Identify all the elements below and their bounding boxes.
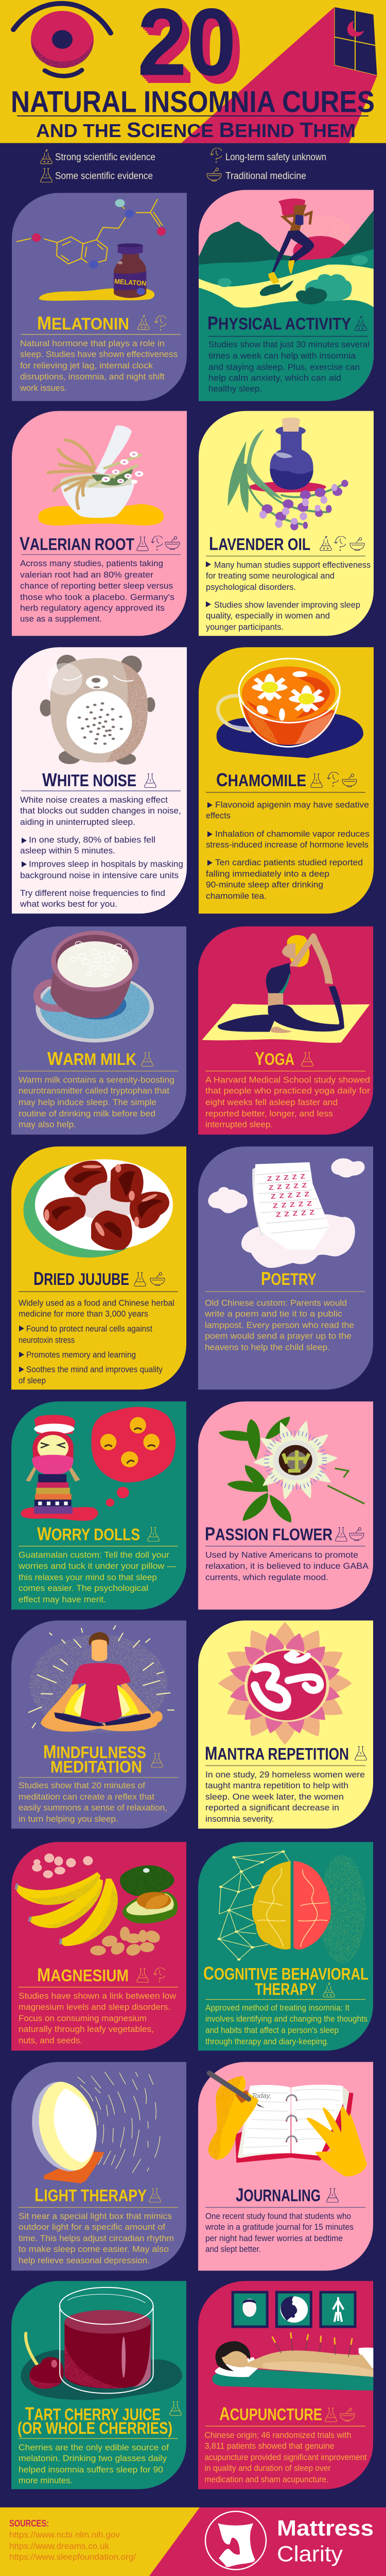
icon: some evidence flask	[41, 168, 52, 182]
text: tart cherry juice: Cherries are the only edible source of	[19, 2442, 169, 2452]
text: yoga: eight weeks fell asleep faster and	[205, 1097, 338, 1107]
icon: some evidence	[336, 1527, 347, 1541]
text: mindfulness meditation: easily summons a sense of relaxation,	[19, 1802, 167, 1812]
icon: traditional	[342, 774, 357, 787]
icon: some evidence	[148, 1527, 159, 1541]
panel: light therapy	[11, 2062, 186, 2270]
text: physical activity: help calm anxiety, which can aid	[208, 373, 341, 383]
text: light therapy	[19, 2211, 174, 2265]
heading: cognitive behavioral therapy	[203, 1962, 369, 1999]
text: poetry: write a poem and tie it to a public	[204, 1309, 342, 1318]
heading: mindfulness meditation	[43, 1741, 146, 1776]
text: valerian root: Across many studies, patients taking	[20, 558, 163, 568]
text: light therapy: help relieve seasonal depression.	[19, 2255, 150, 2265]
text: magnesium	[19, 1991, 177, 2045]
illustration: acupuncture	[212, 2292, 373, 2391]
icon: strong evidence	[320, 536, 331, 551]
heading: melatonin: MELATONIN	[37, 312, 129, 333]
text: warm milk: may help induce sleep. The simple	[19, 1097, 156, 1107]
icon: mortar	[207, 168, 221, 181]
panel: cognitive behavioral therapy	[198, 1842, 373, 2050]
icon: some evidence	[142, 1052, 153, 1066]
heading: chamomile: CHAMOMILE	[216, 769, 306, 790]
legend label strong: Strong scientific evidence	[55, 152, 155, 163]
illustration: poem on clouds: z z z z z	[270, 1189, 310, 1201]
panel: valerian root	[12, 411, 187, 636]
text: lavender oil: younger participants.	[206, 622, 284, 632]
text: magnesium: Focus on consuming magnesium	[19, 2013, 147, 2023]
heading: warm milk: WARM MILK	[47, 1048, 136, 1069]
text: acupuncture: 3,811 patients showed that genuine	[205, 2441, 335, 2451]
text: chamomile: Flavonoid apigenin may have sedative	[215, 800, 369, 809]
heading: cognitive behavioral therapy: THERAPY	[255, 1980, 317, 1999]
legend label safety: Long-term safety unknown	[225, 152, 326, 163]
icon: some evidence	[325, 2408, 337, 2422]
text: physical activity	[208, 339, 370, 394]
panel: mantra repetition	[198, 1620, 373, 1828]
illustration: poem on clouds: z z z z z	[272, 1198, 312, 1210]
text: yoga: that people who practiced yoga daily for	[205, 1086, 370, 1096]
illustration: chamomile tea cup	[217, 658, 363, 758]
text: chamomile	[206, 800, 370, 901]
text: valerian root: those who took a placebo. Germany's	[20, 592, 174, 602]
text: dried jujube: Found to protect neural cells against	[26, 1324, 152, 1333]
text: warm milk	[19, 1075, 174, 1129]
text: dried jujube: Widely used as a food and Chinese herbal	[19, 1298, 174, 1308]
text: worry dolls	[18, 1550, 177, 1604]
text: lavender oil: for treating some neurological and	[206, 570, 335, 581]
illustration: mortar and roots	[38, 426, 164, 526]
text: mantra repetition	[205, 1769, 365, 1824]
text: cognitive behavioral therapy: and habits that affect a person's sleep	[205, 2025, 339, 2035]
text: worry dolls: effect may have merit.	[19, 1594, 106, 1604]
illustration: brain and network	[218, 1851, 366, 1963]
icon: strong evidence	[138, 315, 149, 330]
heading: passion flower: PASSION FLOWER	[205, 1523, 332, 1544]
illustration: poem on clouds: z z z z z	[268, 1180, 307, 1192]
text: acupuncture: acupuncture provided significant improvement	[205, 2452, 367, 2462]
text: chamomile: 90-minute sleep after drinking	[206, 879, 323, 889]
footer	[0, 2507, 386, 2576]
panel: poetry	[198, 1146, 373, 1389]
text: cognitive behavioral therapy: through therapy and diary-keeping.	[205, 2036, 329, 2046]
text: yoga: A Harvard Medical School study showed	[205, 1075, 370, 1085]
panel: melatonin	[12, 193, 187, 401]
icon: traditional	[150, 1273, 165, 1285]
illustration: runner in landscape	[199, 198, 374, 404]
text: journaling: One recent study found that students who	[205, 2211, 351, 2221]
text: warm milk: routine of drinking milk before bed	[19, 1108, 155, 1118]
heading: tart cherry juice: (OR WHOLE CHERRIES)	[17, 2419, 172, 2438]
illustration: light therapy lamp	[32, 2072, 160, 2183]
text: worry dolls: this relaxes your mind so that sleep	[19, 1572, 157, 1582]
text: white noise: what works best for you.	[20, 899, 117, 909]
text: journaling: per night had fewer worries at bedtime	[205, 2233, 343, 2243]
icon: some evidence	[327, 2188, 338, 2202]
illustration: journal and hands: Today,	[252, 2092, 271, 2099]
logo wordmark: Mattress	[277, 2516, 374, 2540]
illustration: plate of jujubes	[23, 1159, 173, 1258]
panel: magnesium	[11, 1842, 186, 2050]
text: physical activity: and staying asleep. Plus, exercise can	[208, 362, 360, 372]
text: acupuncture: Chinese origin; 46 randomized trials with	[205, 2430, 351, 2440]
text: valerian root	[20, 558, 174, 623]
icon: traditional	[165, 536, 180, 550]
text: passion flower	[205, 1550, 369, 1582]
icon: traditional	[350, 537, 364, 551]
text: acupuncture	[205, 2430, 367, 2484]
text: melatonin: disruptions, insomnia, and night shift	[20, 371, 165, 381]
sources heading: SOURCES:	[9, 2518, 49, 2529]
text: lavender oil	[206, 560, 371, 632]
illustration: lavender oil bottle	[228, 417, 348, 530]
illustration: journal and hands	[208, 2073, 367, 2176]
icon: strong evidence	[323, 1983, 335, 1997]
text: white noise: White noise creates a masking effect	[20, 794, 168, 805]
text: journaling: and slept better.	[205, 2244, 261, 2254]
logo: mattress clarity mark	[205, 2512, 266, 2570]
panel: mindfulness meditation	[11, 1620, 186, 1828]
text: acupuncture: in quality and duration of sleep over	[205, 2463, 331, 2473]
text: valerian root: herb regulatory agency approved its	[20, 603, 165, 613]
text: white noise	[20, 794, 183, 909]
text: melatonin: sleep. Studies have shown effectiveness	[20, 349, 178, 359]
panel: yoga	[198, 926, 373, 1134]
text: cognitive behavioral therapy: Approved method of treating insomnia: It	[205, 2003, 349, 2013]
text: journaling	[205, 2211, 354, 2254]
text: valerian root: valerian root had an 80% greater	[20, 570, 153, 580]
legend label traditional: Traditional medicine	[225, 171, 306, 181]
logo wordmark	[277, 2516, 374, 2566]
text: white noise: asleep within 5 minutes.	[20, 845, 115, 855]
panel: lavender oil	[199, 411, 374, 636]
text: tart cherry juice: helped insomnia suffers sleep for 90	[19, 2464, 163, 2475]
text: light therapy: time. This helps adjust circadian rhythm	[19, 2233, 174, 2243]
heading: mindfulness meditation: MINDFULNESS	[43, 1741, 146, 1762]
icon: some evidence	[134, 1272, 146, 1286]
text: white noise: Try different noise frequencies to find	[20, 888, 165, 898]
text: cognitive behavioral therapy	[205, 2003, 367, 2046]
text: chamomile: falling immediately into a deep	[206, 869, 329, 878]
text: dried jujube: of sleep	[19, 1375, 46, 1385]
text: poetry: Old Chinese custom: Parents would	[205, 1298, 347, 1308]
text: mantra repetition: sleep. One week later, the women	[205, 1791, 344, 1802]
text: physical activity: Studies show that just 30 minutes several	[208, 339, 370, 349]
text: cognitive behavioral therapy: involves identifying and changing the thoughts	[205, 2013, 367, 2024]
illustration: passion flower	[219, 1417, 364, 1522]
text: magnesium: Studies have shown a link between low	[19, 1991, 177, 2001]
illustration: om lotus mandala	[218, 1622, 352, 1744]
text: tart cherry juice: more minutes.	[19, 2475, 73, 2485]
text: mindfulness meditation: Studies show that 20 minutes of	[19, 1780, 145, 1790]
panel: chamomile	[199, 647, 374, 913]
text: physical activity: times a week can help with insomnia	[208, 350, 356, 361]
icon: traditional	[340, 2408, 355, 2421]
text: yoga: reported better, longer, and less	[205, 1108, 333, 1118]
heading: tart cherry juice: TART CHERRY JUICE	[25, 2403, 161, 2424]
panel: physical activity	[199, 190, 374, 404]
icon: safety unknown	[327, 772, 339, 787]
text: yoga: interrupted sleep.	[205, 1119, 273, 1129]
sources list: https://www.ncbi.nlm.nih.gov	[9, 2530, 120, 2539]
text: white noise: that blocks out sudden changes in noise,	[20, 805, 181, 816]
icon: strong evidence flask	[41, 150, 52, 164]
text: valerian root: use as a supplement.	[20, 614, 102, 623]
text: mantra repetition: taught mantra repetition to help with	[205, 1780, 348, 1790]
heading: dried jujube: DRIED JUJUBE	[33, 1268, 129, 1289]
text: dried jujube: Soothes the mind and improves quality	[26, 1364, 163, 1375]
text: magnesium: naturally through leafy vegetables,	[19, 2024, 154, 2034]
text: lavender oil: psychological disorders.	[206, 582, 296, 592]
illustration: poem on clouds: z z z z z	[267, 1171, 306, 1183]
title line 2: AND THE SCIENCE BEHIND THEM	[36, 118, 356, 142]
illustration: worry doll and thought bubble	[21, 1407, 176, 1521]
text: warm milk: Warm milk contains a serenity-boosting	[19, 1075, 174, 1085]
text: melatonin: for relieving jet lag, internal clock	[20, 361, 153, 370]
header panel	[0, 0, 386, 143]
text: dried jujube: neurotoxin stress	[19, 1335, 75, 1345]
text: light therapy: Sit near a special light box that mimics	[19, 2211, 172, 2221]
icon: safety unknown	[154, 316, 167, 330]
icon: some evidence	[151, 1753, 163, 1767]
light beam from window	[181, 7, 377, 143]
illustration: yoga pose on mat	[202, 934, 370, 1043]
illustration: cup of warm milk	[36, 930, 154, 1042]
text: white noise: Improves sleep in hospitals by masking	[29, 859, 183, 869]
heading: acupuncture: ACUPUNCTURE	[219, 2403, 322, 2424]
icon: some evidence	[149, 2188, 161, 2202]
heading: white noise: WHITE NOISE	[42, 769, 136, 790]
text: worry dolls: comes easier. The psychological	[19, 1583, 148, 1593]
text: mantra repetition: reported a significant decrease in	[205, 1802, 339, 1812]
text: passion flower: Used by Native Americans to promote	[205, 1550, 358, 1560]
panel: journaling	[198, 2062, 373, 2270]
icon: some evidence	[137, 1968, 148, 1982]
text: dried jujube	[19, 1298, 174, 1385]
heading: mindfulness meditation: MEDITATION	[50, 1758, 142, 1776]
heading: tart cherry juice	[17, 2403, 172, 2438]
text: journaling: wrote in a gratitude journal for 15 minutes	[205, 2222, 354, 2232]
text: melatonin	[20, 338, 178, 393]
legend label some: Some scientific evidence	[55, 171, 153, 181]
text: magnesium: magnesium levels and sleep disorders.	[19, 2002, 170, 2012]
illustration: melatonin molecule and bottle	[16, 199, 166, 301]
heading: lavender oil: LAVENDER OIL	[209, 533, 310, 554]
text: lavender oil: quality, especially in women and	[206, 611, 330, 621]
text: yoga	[205, 1075, 370, 1129]
icon: some evidence	[355, 1747, 366, 1760]
illustration: poem on clouds	[208, 1158, 365, 1268]
icon: eye	[13, 4, 111, 76]
panel: acupuncture	[198, 2281, 373, 2489]
panel: dried jujube	[11, 1146, 186, 1389]
text: mantra repetition: insomnia severity.	[205, 1814, 274, 1824]
icon: some evidence	[137, 537, 148, 551]
icon: strong evidence	[355, 316, 366, 331]
text: mindfulness meditation: meditation can create a reflex that	[19, 1791, 154, 1802]
text: warm milk: may also help.	[19, 1119, 76, 1129]
text: lavender oil: Many human studies support effectiveness	[214, 560, 371, 570]
text: light therapy: outdoor light for a specific amount of	[19, 2222, 165, 2232]
text: dried jujube: medicine for more than 3,000 years	[19, 1309, 148, 1318]
icon: some evidence	[170, 2401, 181, 2415]
text: tart cherry juice	[19, 2442, 169, 2485]
panel: white noise	[12, 647, 187, 913]
panel: worry dolls	[11, 1401, 186, 1609]
text: chamomile: effects	[206, 810, 231, 820]
text: physical activity: healthy sleep.	[208, 384, 262, 394]
icon: safety unknown	[151, 536, 163, 550]
text: warm milk: neurotransmitter called tryptophan that	[19, 1086, 169, 1096]
text: chamomile: stress-induced increase of hormone levels	[206, 839, 369, 850]
text: tart cherry juice: melatonin. Drinking two glasses daily	[19, 2453, 167, 2463]
text: chamomile: Ten cardiac patients studied reported	[215, 857, 363, 867]
text: worry dolls: Guatamalan custom: Tell the doll your	[19, 1550, 169, 1560]
sources list	[9, 2530, 136, 2562]
text: light therapy: to make sleep come easier. May also	[19, 2244, 169, 2254]
heading: journaling: JOURNALING	[236, 2184, 321, 2205]
icon: safety unknown	[153, 1968, 166, 1982]
text: poetry: poem would send a prayer up to the	[205, 1331, 352, 1341]
heading: physical activity: PHYSICAL ACTIVITY	[207, 312, 351, 333]
icon: window with moon	[335, 7, 377, 75]
text: dried jujube: Promotes memory and learning	[26, 1349, 136, 1360]
text: melatonin: work issues.	[20, 383, 67, 393]
text: poetry: lamppost. Every person who read the	[205, 1320, 354, 1330]
heading: valerian root: VALERIAN ROOT	[20, 533, 134, 554]
illustration: poem on clouds: z z z z z	[275, 1207, 315, 1219]
legend	[41, 148, 326, 182]
text: mindfulness meditation	[19, 1780, 167, 1824]
text: mindfulness meditation: in turn helping you sleep.	[19, 1814, 118, 1824]
logo wordmark: Clarity	[277, 2541, 343, 2566]
icon: clock question	[210, 148, 222, 163]
text: acupuncture: medication and sham acupuncture.	[205, 2474, 328, 2484]
illustration: magnesium foods	[16, 1854, 178, 1957]
heading: mantra repetition: MANTRA REPETITION	[205, 1742, 349, 1764]
icon: safety unknown	[334, 536, 346, 551]
panel: tart cherry juice	[11, 2281, 186, 2489]
text: lavender oil: Studies show lavender improving sleep	[214, 600, 360, 610]
text: poetry	[204, 1298, 354, 1352]
text: poetry: heavens to help the child sleep.	[205, 1342, 330, 1352]
text: chamomile: Inhalation of chamomile vapor reduces	[215, 828, 370, 839]
text: valerian root: chance of reporting better sleep versus	[20, 581, 173, 590]
text: chamomile: chamomile tea.	[206, 891, 267, 901]
heading: yoga: YOGA	[255, 1048, 294, 1069]
heading: light therapy: LIGHT THERAPY	[34, 2184, 147, 2205]
sources list: https://www.dreams.co.uk	[9, 2541, 109, 2551]
sources list: https://www.sleepfoundation.org/	[9, 2552, 136, 2562]
text: white noise: background noise in intensive care units	[20, 870, 179, 880]
panel: warm milk	[11, 926, 186, 1134]
illustration: glass of cherry juice	[21, 2287, 182, 2400]
panel: passion flower	[198, 1401, 373, 1609]
icon: traditional	[349, 1528, 364, 1540]
icon: some evidence	[145, 773, 156, 788]
text: passion flower: currents, which regulate mood.	[205, 1572, 328, 1582]
heading: magnesium: MAGNESIUM	[37, 1964, 129, 1985]
icon: some evidence	[311, 773, 322, 788]
text: mantra repetition: In one study, 29 homeless women were	[205, 1769, 365, 1780]
text: magnesium: nuts, and seeds.	[19, 2035, 82, 2045]
text: passion flower: relaxation, it is believed to induce GABA	[205, 1561, 369, 1571]
illustration: melatonin molecule and bottle: MELATON	[114, 278, 147, 287]
illustration: white noise bear	[40, 655, 155, 765]
text: white noise: aiding in uninterrupted sleep.	[20, 817, 135, 827]
text: worry dolls: worries and tuck it under your pillow —	[18, 1561, 177, 1571]
illustration: meditating person	[28, 1625, 174, 1733]
heading: poetry: POETRY	[261, 1268, 317, 1289]
heading: worry dolls: WORRY DOLLS	[37, 1523, 140, 1544]
text: white noise: In one study, 80% of babies fell	[29, 835, 155, 844]
icon: some evidence	[302, 1052, 313, 1066]
text: melatonin: Natural hormone that plays a role in	[20, 338, 165, 348]
